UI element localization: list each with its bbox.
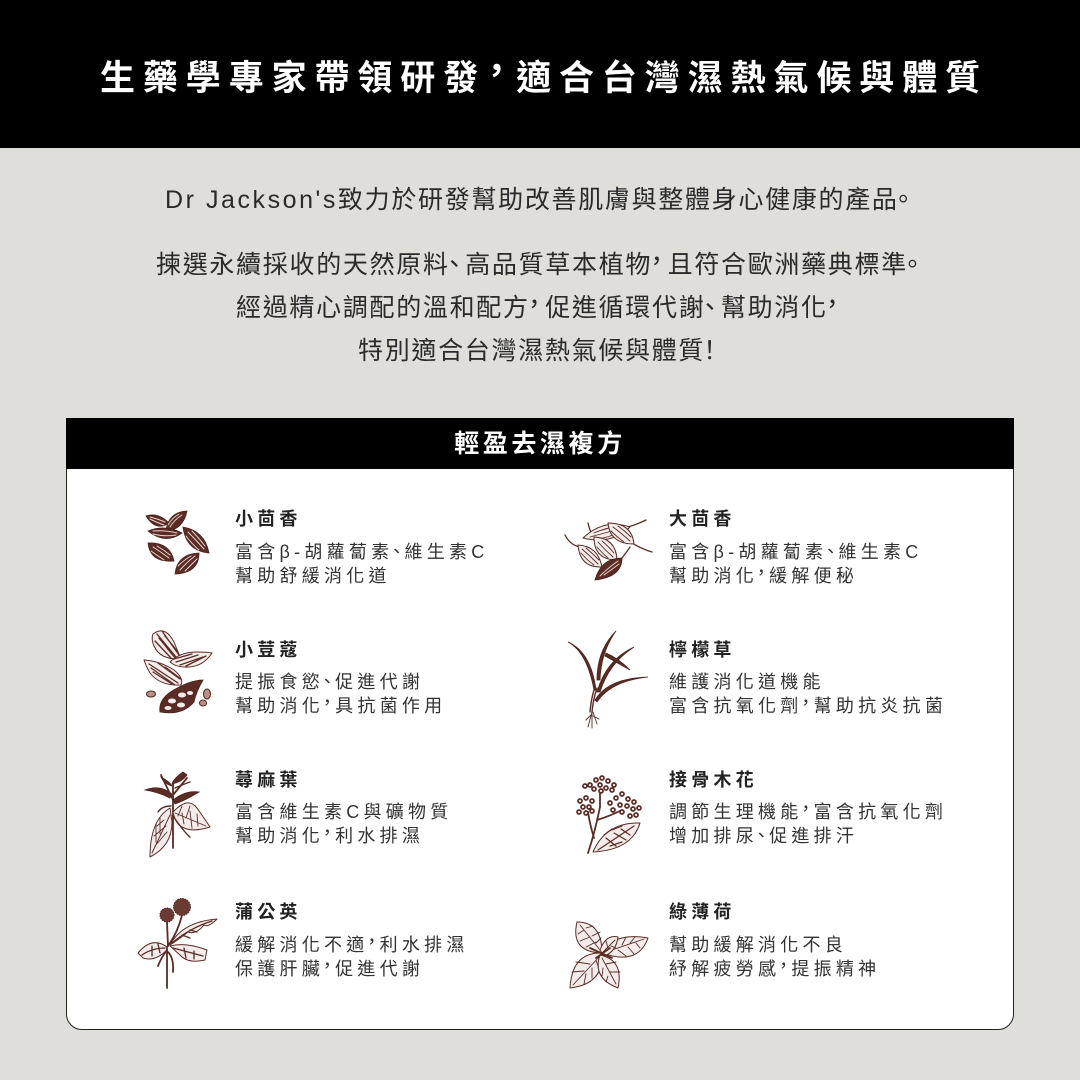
intro line 2: 。 [900, 251, 925, 279]
herb benefits line 2: 增加排尿 促進排汗 [669, 826, 858, 846]
panel heading bar [66, 418, 1014, 469]
herb benefits line 2: ， [752, 563, 770, 583]
herb benefits line 1: 、 [822, 542, 840, 562]
herb benefits line 1: 緩解消化不適 利水排濕 [235, 935, 469, 955]
herb benefits line 1: 維護消化道機能 [669, 672, 825, 692]
herb: elderflower [576, 770, 947, 854]
herb benefits line 1: ， [797, 799, 815, 819]
herb benefits line 1: 富含β-胡蘿蔔素 維生素C [669, 542, 923, 562]
herb benefits line 1: 、 [388, 542, 406, 562]
intro line 2: 、 [442, 251, 467, 279]
intro line 4: ！ [697, 337, 722, 365]
herb benefits line 2: 富含抗氧化劑 幫助抗炎抗菌 [669, 696, 947, 716]
intro text block [156, 186, 925, 365]
title: ， [479, 52, 514, 91]
herb benefits line 2: 紓解疲勞感 提振精神 [669, 959, 880, 979]
herb benefits line 2: 保護肝臟 促進代謝 [235, 959, 424, 979]
herb benefits line 2: 幫助舒緩消化道 [235, 566, 391, 586]
panel: formula card [66, 418, 1014, 1030]
herb: lemongrass [568, 630, 947, 728]
icon: mint leaves [570, 922, 648, 988]
herb benefits line 2: 幫助消化 具抗菌作用 [235, 696, 446, 716]
herb name: 大茴香 [669, 509, 736, 529]
herb name: 小茴香 [235, 509, 302, 529]
icon: dandelion [138, 898, 218, 989]
herb name: 綠薄荷 [669, 902, 736, 922]
herb benefits line 2: 、 [752, 826, 770, 846]
herb name: 小荳蔻 [235, 640, 302, 660]
icon: elderflower [576, 775, 642, 854]
icon: cardamom pods [144, 630, 212, 714]
icon: nettle leaves [144, 772, 210, 858]
intro line 1: Dr Jackson's致力於研發幫助改善肌膚與整體身心健康的產品 [165, 186, 899, 214]
herb: cardamom [144, 630, 446, 716]
herb benefits line 2: 幫助消化 利水排濕 [235, 826, 424, 846]
herb name: 蒲公英 [235, 902, 302, 922]
herb: star anise fennel [564, 509, 923, 586]
intro line 2: ， [644, 248, 669, 276]
intro line 3: ， [820, 290, 845, 318]
herb benefits line 1: 調節生理機能 富含抗氧化劑 [669, 802, 947, 822]
herb benefits line 1: 富含維生素C與礦物質 [235, 802, 452, 822]
intro line 2: 揀選永續採收的天然原料 高品質草本植物 且符合歐洲藥典標準 [156, 251, 908, 279]
intro line 3: 、 [697, 294, 722, 322]
herb benefits line 2: ， [318, 823, 336, 843]
herb benefits line 2: 幫助消化 緩解便秘 [669, 566, 858, 586]
intro line 3: 經過精心調配的溫和配方 促進循環代謝 幫助消化 [236, 294, 828, 322]
herb benefits line 1: ， [363, 932, 381, 952]
title: 生藥學專家帶領研發 適合台灣濕熱氣候與體質 [100, 59, 988, 98]
icon: lemongrass [568, 630, 648, 728]
herb: nettle [144, 770, 452, 858]
icon: fennel seeds [145, 510, 210, 574]
herb benefits line 2: ， [318, 956, 336, 976]
intro line 4: 特別適合台灣濕熱氣候與體質 [358, 337, 705, 365]
herb benefits line 1: 富含β-胡蘿蔔素 維生素C [235, 542, 489, 562]
icon: long seeds [564, 519, 653, 580]
herb name: 蕁麻葉 [235, 770, 302, 790]
herb name: 接骨木花 [669, 770, 758, 790]
herb benefits line 2: ， [774, 956, 792, 976]
herb benefits line 1: 、 [318, 672, 336, 692]
herb benefits line 1: 提振食慾 促進代謝 [235, 672, 424, 692]
herb benefits line 1: 幫助緩解消化不良 [669, 935, 847, 955]
herb benefits line 2: ， [797, 693, 815, 713]
herb: dandelion [138, 898, 469, 989]
panel heading bar: 輕盈去濕複方 [454, 430, 626, 458]
herb name: 檸檬草 [669, 640, 736, 660]
intro line 3: ， [522, 290, 547, 318]
intro line 1: 。 [891, 186, 916, 214]
header band [0, 0, 1080, 148]
herb benefits line 2: ， [318, 693, 336, 713]
herb: spearmint [570, 902, 880, 988]
herb: fennel [145, 509, 489, 586]
